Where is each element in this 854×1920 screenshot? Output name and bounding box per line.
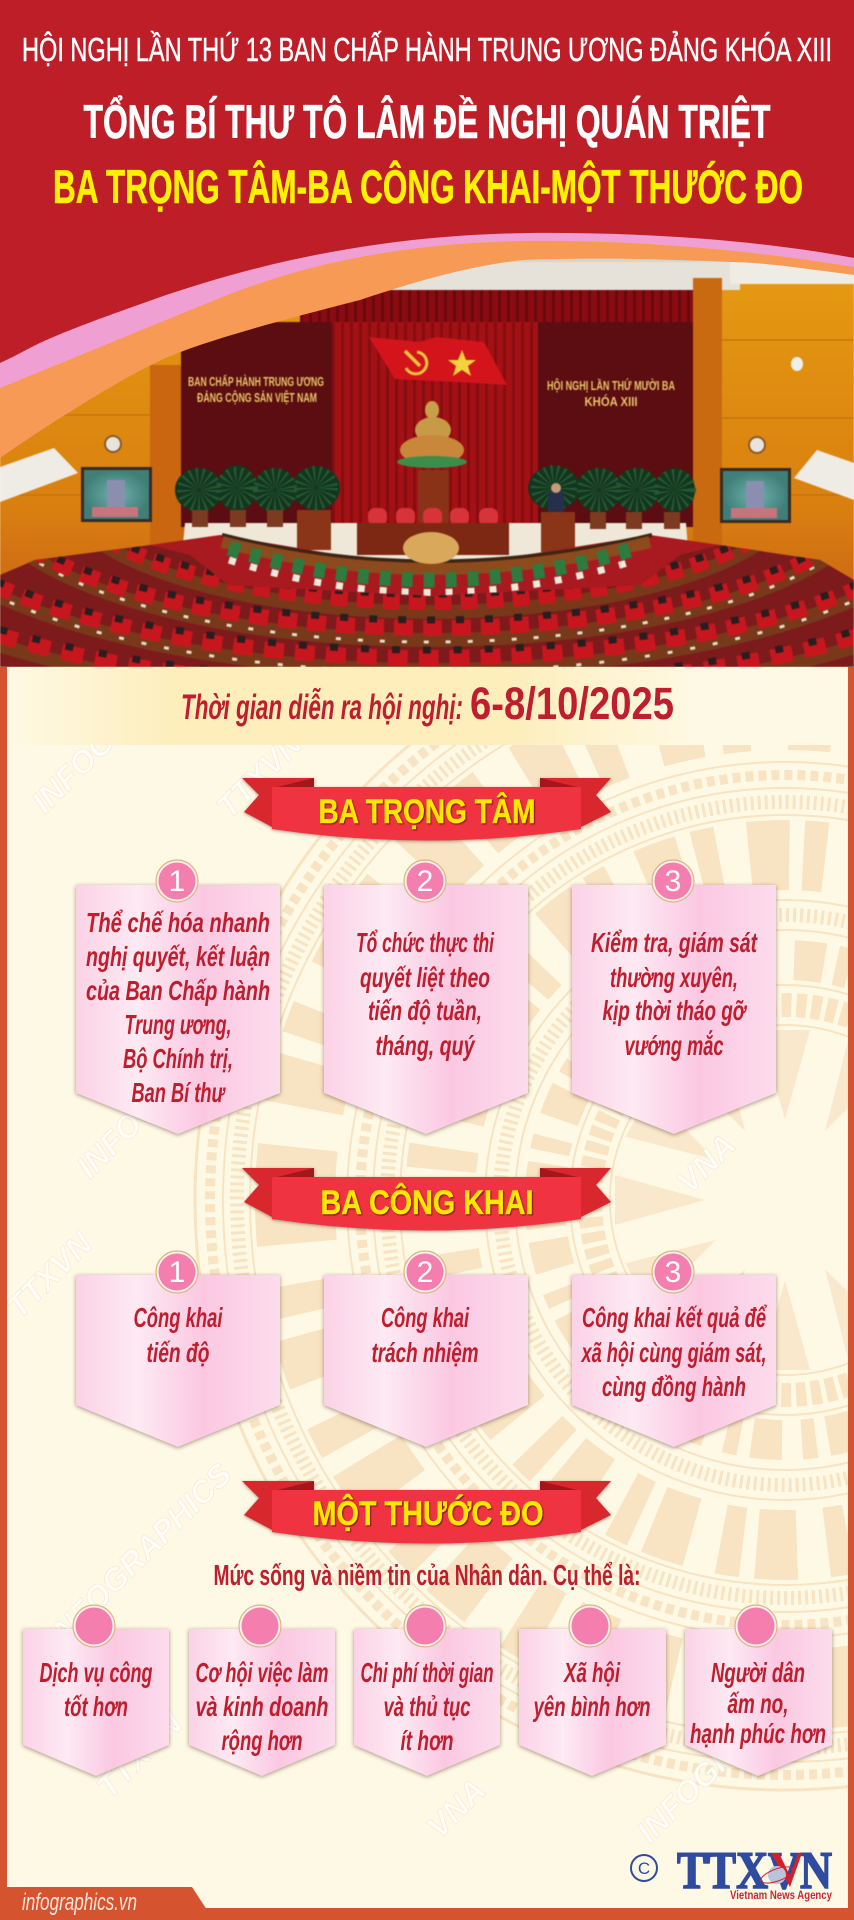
badge 2: 2 <box>417 1256 433 1289</box>
card text <box>360 1657 494 1756</box>
photo: walls <box>0 283 854 580</box>
badge 1 <box>156 860 198 902</box>
card text <box>86 907 270 1108</box>
card text: và thủ tục <box>384 1691 471 1722</box>
copyright mark <box>631 1855 657 1881</box>
badge 2 <box>404 860 446 902</box>
photo: backdrop lettering: ĐẢNG CỘNG SẢN VIỆT NAM <box>197 390 317 405</box>
ribbon: BA CÔNG KHAI <box>242 1168 611 1230</box>
card text: Tổ chức thực thi <box>356 927 495 958</box>
photo: wall clocks <box>105 436 765 453</box>
card text <box>372 1302 478 1368</box>
date text: Thời gian diễn ra hội nghị: <box>181 687 463 727</box>
photo: presidium table <box>357 523 509 555</box>
card text: nghị quyết, kết luận <box>86 941 270 972</box>
watermarks: TTXVN <box>89 1705 190 1805</box>
badge <box>735 1605 777 1647</box>
card text <box>196 1657 328 1756</box>
badge 3: 3 <box>665 1256 681 1289</box>
photo: flower bouquet <box>403 532 459 564</box>
watermarks <box>0 621 829 1850</box>
card text: trách nhiệm <box>372 1337 478 1368</box>
card text: Xã hội <box>563 1657 621 1688</box>
card: dịch vụ công <box>23 1605 169 1776</box>
date text: 6-8/10/2025 <box>470 678 674 729</box>
card 1: ba trọng tâm <box>76 860 280 1134</box>
watermarks: TTXVN <box>209 725 310 825</box>
card text: cùng đồng hành <box>602 1371 746 1402</box>
curved band: pink <box>0 0 854 388</box>
card text: Thể chế hóa nhanh <box>86 907 270 938</box>
footer tab <box>0 1887 207 1910</box>
photo: palm plants <box>175 465 695 529</box>
watermarks: VNA <box>419 1772 493 1845</box>
photo: bust and flower stand <box>397 401 467 526</box>
watermarks: INFOGRAPHICS <box>629 1651 829 1850</box>
ribbon: MỘT THƯỚC ĐO: MỘT THƯỚC ĐO <box>312 1494 544 1533</box>
card text: Ban Bí thư <box>132 1077 226 1108</box>
card text: tháng, quý <box>376 1030 475 1061</box>
card text: Chi phí thời gian <box>360 1657 494 1688</box>
card text: kịp thời tháo gỡ <box>602 995 748 1026</box>
badge 1 <box>156 1251 198 1293</box>
card text: vướng mắc <box>624 1030 724 1061</box>
ribbon: MỘT THƯỚC ĐO <box>242 1481 611 1544</box>
card text: Người dân <box>711 1657 805 1688</box>
photo: backdrop lettering: KHÓA XIII <box>584 394 638 409</box>
photo: presidium chairs <box>368 508 498 524</box>
date band <box>7 667 848 745</box>
card 3: ba trọng tâm <box>572 860 776 1134</box>
card text: Dịch vụ công <box>40 1657 152 1688</box>
red V and globe <box>759 1853 802 1887</box>
copyright mark: C <box>638 1859 650 1878</box>
card 2: ba trọng tâm <box>324 860 528 1134</box>
card text: rộng hơn <box>222 1725 302 1756</box>
photo: carpet <box>150 534 720 596</box>
badge 3 <box>652 860 694 902</box>
photo: camera <box>791 357 803 371</box>
intro text: mức sống: Mức sống và niềm tin của Nhân dân. Cụ thể là: <box>214 1560 640 1592</box>
card text <box>580 1302 767 1402</box>
photo: podiums <box>297 510 575 552</box>
photo: side screens <box>81 467 791 523</box>
photo: wall ledges <box>0 448 854 502</box>
card text <box>356 927 495 1061</box>
card text: tiến độ tuần, <box>368 995 482 1026</box>
card: chi phí thời gian <box>354 1605 500 1776</box>
badge <box>73 1605 115 1647</box>
card text: Trung ương, <box>124 1009 232 1040</box>
ribbon: BA CÔNG KHAI: BA CÔNG KHAI <box>320 1183 534 1222</box>
card 2: ba công khai <box>324 1251 528 1447</box>
card 1: ba công khai <box>76 1251 280 1447</box>
photo: backdrop panels <box>181 322 332 527</box>
photo: seating <box>0 544 854 667</box>
watermarks: INFOGRAPHICS <box>69 986 269 1185</box>
badge 1: 1 <box>169 865 185 898</box>
watermarks: INFOGRAPHICS <box>39 1456 239 1655</box>
card text: Công khai <box>381 1302 470 1333</box>
card text: và kinh doanh <box>196 1691 328 1722</box>
ribbon: BA TRỌNG TÂM: BA TRỌNG TÂM <box>318 793 536 831</box>
card text <box>40 1657 152 1722</box>
card text: Kiểm tra, giám sát <box>591 927 758 958</box>
ribbon: BA TRỌNG TÂM <box>242 778 611 840</box>
badge <box>239 1605 281 1647</box>
conference hall photo <box>0 258 854 667</box>
card text: Công khai <box>134 1302 223 1333</box>
badge 2: 2 <box>417 865 433 898</box>
card text: ít hơn <box>400 1725 454 1756</box>
photo: ceiling <box>506 258 738 262</box>
watermarks: VNA <box>669 1127 743 1200</box>
card text: của Ban Chấp hành <box>86 975 270 1006</box>
card 3: ba công khai <box>572 1251 776 1447</box>
card text <box>690 1657 826 1749</box>
photo: stage front and plant row <box>222 535 652 592</box>
card text: yên bình hơn <box>532 1691 650 1722</box>
background: bronze drum pattern <box>194 745 848 1792</box>
date text <box>181 678 674 729</box>
card text: quyết liệt theo <box>360 962 490 993</box>
footer site name: infographics.vn <box>22 1889 137 1916</box>
card text: Bộ Chính trị, <box>123 1043 233 1074</box>
curved band: orange <box>0 0 854 458</box>
badge <box>569 1605 611 1647</box>
badge <box>404 1605 446 1647</box>
card text: tốt hơn <box>64 1691 128 1722</box>
card text: thường xuyên, <box>610 962 738 993</box>
watermarks: INFOGRAPHICS <box>24 621 224 820</box>
card: cơ hội việc làm <box>189 1605 335 1776</box>
agency tagline: Vietnam News Agency <box>730 1888 832 1902</box>
photo: speaker <box>548 483 564 512</box>
photo: backdrop lettering: BAN CHẤP HÀNH TRUNG ƯƠNG <box>188 374 324 389</box>
logo: TTXVN <box>631 1842 832 1902</box>
watermarks: TTXVN <box>0 1225 100 1325</box>
badge 2 <box>404 1251 446 1293</box>
card text: ấm no, <box>728 1688 788 1719</box>
card text <box>134 1302 223 1368</box>
card: xã hội yên bình <box>519 1605 666 1776</box>
card text <box>591 927 758 1061</box>
photo: flag <box>369 337 507 385</box>
header: red background <box>0 0 854 363</box>
card text: Cơ hội việc làm <box>196 1657 328 1688</box>
photo: stage floor <box>182 522 688 560</box>
page border <box>0 667 854 1920</box>
card text <box>532 1657 650 1722</box>
card: người dân <box>685 1605 832 1776</box>
badge 1: 1 <box>169 1256 185 1289</box>
photo: backdrop lettering <box>188 374 675 409</box>
card text: tiến độ <box>146 1337 210 1368</box>
photo: backdrop lettering: HỘI NGHỊ LẦN THỨ MƯỜI BA <box>547 378 675 393</box>
badge 3: 3 <box>665 865 681 898</box>
badge 3 <box>652 1251 694 1293</box>
